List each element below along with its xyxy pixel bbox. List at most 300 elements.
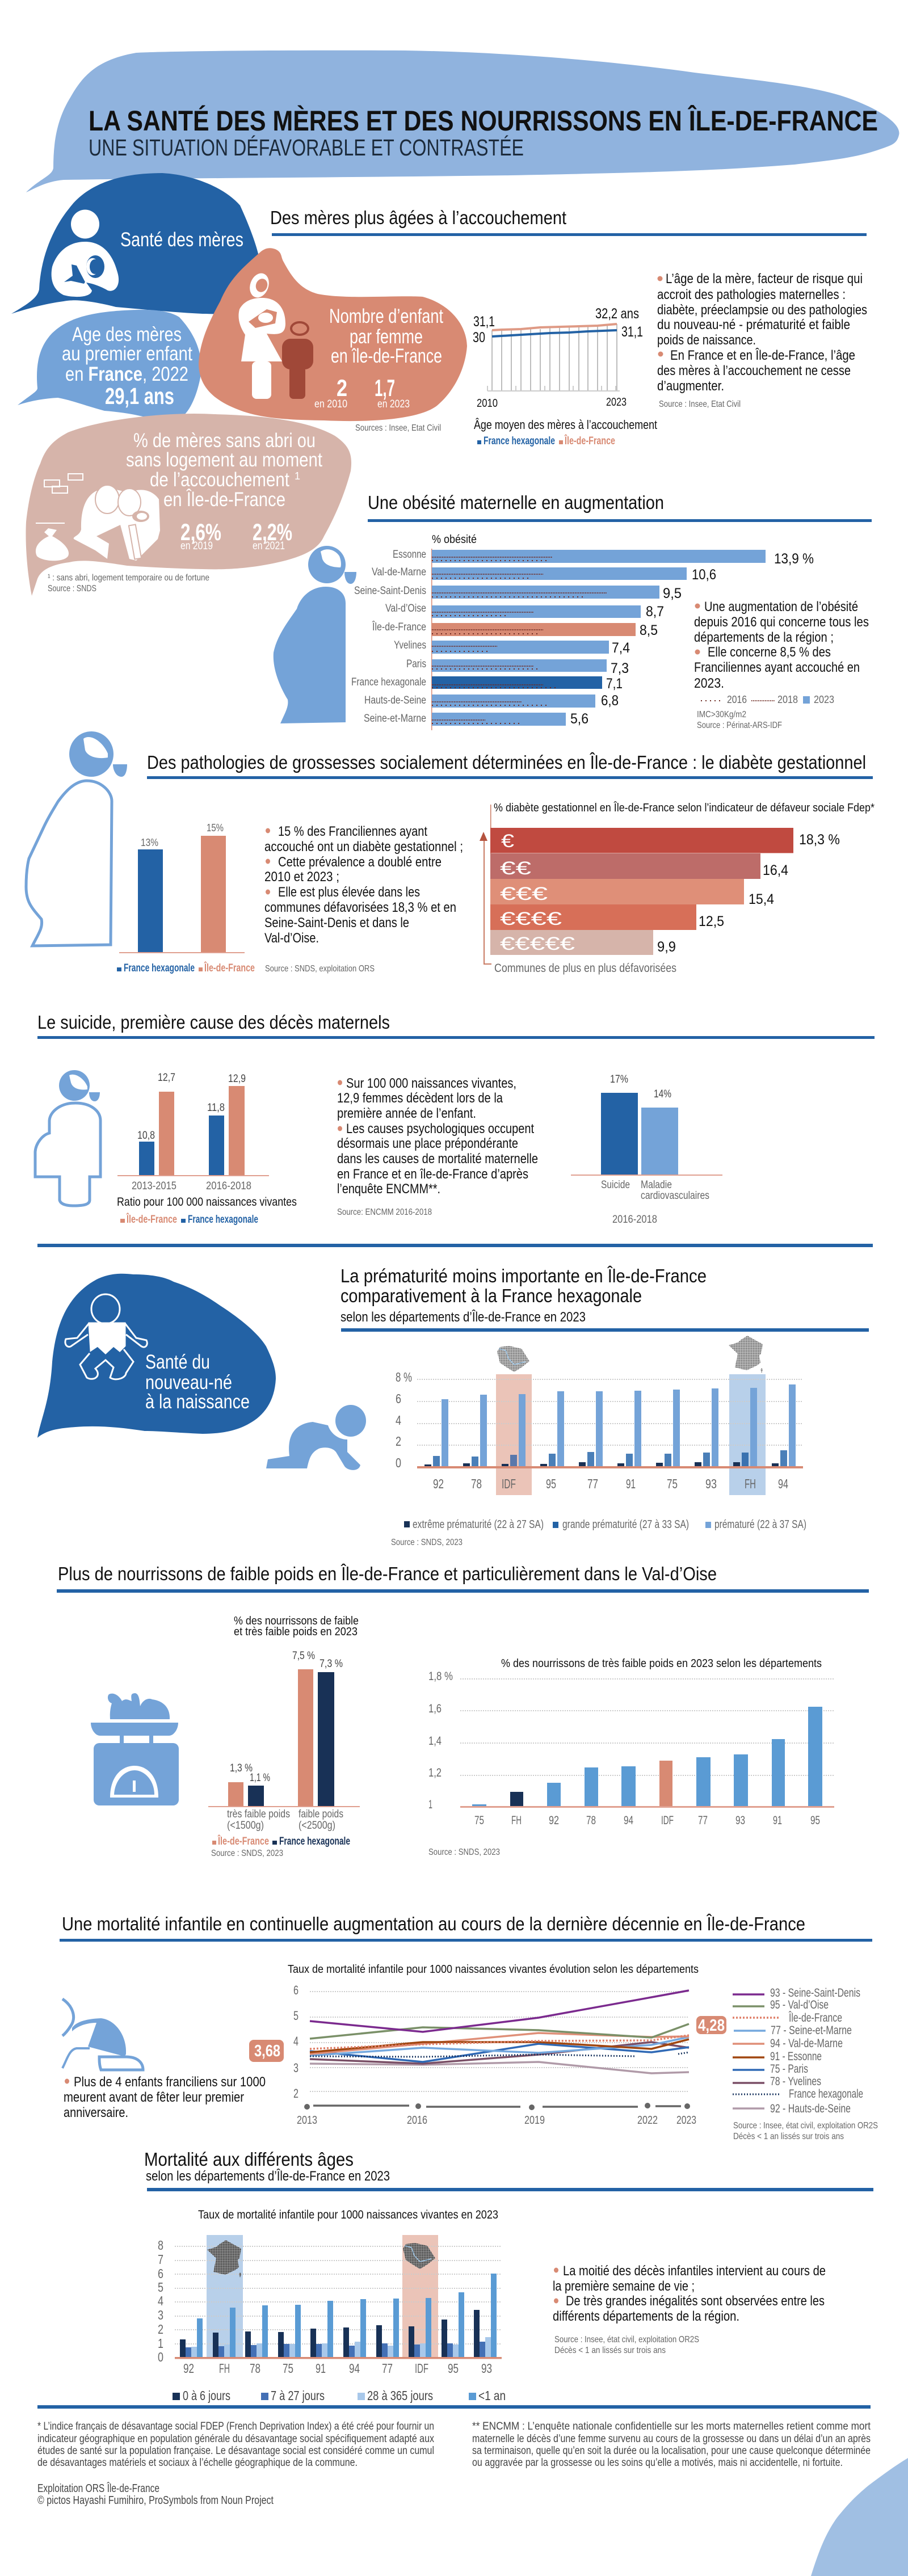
text block: âge de la mère: accroit des pathologies maternelles : <box>657 287 846 302</box>
source: diabète: Source : SNDS, exploitation ORS <box>265 964 375 974</box>
legend: France hexagonale <box>188 1214 258 1226</box>
line chart: mortalité infantile <box>249 1963 863 2127</box>
x axis labels: 91 <box>626 1476 636 1491</box>
axis labels: (<1500g) <box>227 1820 264 1832</box>
y axis labels: 6 <box>158 2266 163 2281</box>
label lines: nouveau-né: Santé du <box>145 1351 210 1373</box>
values: 5,6 <box>570 711 588 727</box>
category labels <box>351 549 426 725</box>
panel: age des mères bubble <box>18 310 201 420</box>
values: 13,9 % <box>774 551 814 567</box>
heading: des mères plus âgées: Des mères plus âgées à l’accouchement <box>270 207 566 228</box>
axis labels: 2013-2015 <box>132 1180 176 1192</box>
credits <box>37 2482 274 2507</box>
label lines: nombre d'enfant: en île-de-France <box>331 345 442 367</box>
chart title: % des nourrissons de très faible poids en 2023 selon les départements <box>501 1657 822 1670</box>
legend: prématurité: extrême prématurité (22 à 27 SA) <box>413 1518 544 1531</box>
icon: woman obese <box>274 546 356 723</box>
x axis labels <box>183 2361 492 2376</box>
legend: prématurité: grande prématurité (27 à 33 SA) <box>562 1518 689 1531</box>
y axis labels: 1 <box>158 2336 163 2351</box>
bar: quintile 1 <box>490 828 793 853</box>
bar chart: causes de décès: 2016-2018 <box>612 1214 657 1226</box>
bars: 7 à 27 jours <box>186 2342 485 2358</box>
x axis labels: FH <box>511 1814 522 1827</box>
legend: mortalité: 95 - Val-d’Oise <box>770 1998 829 2011</box>
label lines: age: 29,1 ans <box>105 383 174 409</box>
bar: quintile 2: €€ <box>500 858 531 878</box>
bar chart: très faible poids <box>428 1657 834 1827</box>
heading: mortalité infantile: Une mortalité infantile en continuelle augmentation au cours de la dernière décennie en Île-de-France <box>62 1913 805 1934</box>
time axis: 2016 <box>407 2114 427 2127</box>
legend: diabète: France hexagonale <box>124 962 195 974</box>
heading: faible poids: Plus de nourrissons de faible poids en Île-de-France et particulièrement dans le Val-d’Oise <box>58 1563 717 1584</box>
text block: mortalité aux âges: La moitié des décès infantiles intervient au cours de <box>563 2263 826 2279</box>
x axis labels <box>474 1814 820 1827</box>
text block: diabète: communes défavorisées 18,3 % et en <box>264 900 456 915</box>
values <box>570 551 814 727</box>
x axis labels: 78 <box>250 2361 260 2376</box>
icon: baby <box>65 1294 147 1379</box>
x axis labels: 95 <box>810 1814 820 1827</box>
values: 8,7 <box>646 604 664 620</box>
highlight: France hexagonale <box>729 1374 766 1495</box>
y axis labels <box>396 1370 412 1470</box>
category labels: Val-d’Oise <box>385 603 426 614</box>
bar: quintile 2 <box>490 853 760 879</box>
source: mortalité aux âges <box>554 2335 699 2355</box>
footnote: ENCMM: ** ENCMM : L’enquête nationale confidentielle sur les morts maternelles retient comme mort <box>472 2421 871 2432</box>
values: Fdep: 15,4 <box>749 891 774 907</box>
x axis labels: IDF <box>661 1814 674 1827</box>
credits: © pictos Hayashi Fumihiro, ProSymbols from Noun Project <box>37 2494 274 2507</box>
values: line chart <box>473 306 643 410</box>
time axis <box>297 2103 696 2127</box>
stat: 2,6 % en 2019: en 2019 <box>180 540 213 552</box>
line chart: âge moyen <box>473 306 657 447</box>
text block: âge de la mère: poids de naissance. <box>657 332 756 348</box>
text block: âge de la mère: En France et en Île-de-France, l’âge <box>670 348 855 363</box>
y axis labels: 2 <box>158 2322 163 2337</box>
panel: santé du nouveau-né bubble <box>37 1274 276 1438</box>
y axis labels: 3 <box>158 2308 163 2322</box>
bar: quintile 5: €€€€€ <box>500 933 575 954</box>
legend: obésité: 2023 <box>814 694 834 705</box>
values: line chart: 2010 <box>477 397 498 410</box>
bar: quintile 5 <box>490 930 653 955</box>
values: Fdep: 9,9 <box>657 939 676 955</box>
x axis labels: 94 <box>778 1476 788 1491</box>
corner bubble <box>811 2458 908 2576</box>
label lines: nouveau-né: à la naissance <box>145 1391 250 1413</box>
legend: obésité: 2018 <box>777 694 798 705</box>
bar chart: mortalité par âge <box>158 2208 502 2376</box>
y axis labels: 8 <box>158 2238 163 2253</box>
category labels: France hexagonale <box>351 676 426 688</box>
chart title: Taux de mortalité infantile pour 1000 naissances vivantes en 2023 <box>198 2208 498 2221</box>
text block: suicide: désormais une place prépondérante <box>337 1136 518 1151</box>
bars 2023 <box>432 550 766 726</box>
panel: nombre d'enfant bubble <box>199 248 467 421</box>
category labels: Yvelines <box>394 639 426 651</box>
stat: 2 en 2010: 2 <box>337 374 347 401</box>
heading: obésité: Une obésité maternelle en augmentation <box>368 492 664 513</box>
label lines: sans abri: sans logement au moment <box>126 449 322 471</box>
icon: map IDF <box>403 2243 435 2269</box>
text block: suicide: 12,9 femmes décèdent lors de la <box>337 1091 503 1106</box>
axis labels <box>227 1808 343 1832</box>
x axis labels: 91 <box>773 1814 782 1827</box>
values: 9,5 <box>663 586 682 601</box>
text block: diabète: Elle est plus élevée dans les <box>278 885 420 900</box>
icon: family without housing <box>36 474 160 561</box>
icon: woman outline (suicide) <box>35 1070 100 1206</box>
heading: santé des mères: Santé des mères <box>120 229 243 251</box>
values: 7,3 <box>611 660 629 676</box>
source: mortalité: Décès < 1 an lissés sur trois ans <box>733 2132 844 2141</box>
callout: 3,68: 3,68 <box>254 2042 280 2060</box>
y axis labels: 1 <box>428 1798 432 1811</box>
source: obésité: IMC>30Kg/m2 <box>697 710 746 719</box>
label lines: nouveau-né <box>145 1351 250 1413</box>
text block: âge de la mère: L’âge de la mère, facteur de risque qui <box>666 271 863 287</box>
source: mortalité aux âges: Décès < 1 an lissés sur trois ans <box>554 2346 666 2355</box>
y axis labels: 5 <box>158 2280 163 2295</box>
highlight: IDF <box>402 2235 438 2358</box>
y axis labels <box>428 1670 453 1811</box>
text block: diabète: accouché ont un diabète gestationnel ; <box>264 839 463 855</box>
x axis labels: 75 <box>667 1476 678 1491</box>
text block: obésité: Une augmentation de l’obésité <box>704 599 858 614</box>
text block: diabète: 2010 et 2023 ; <box>264 869 339 885</box>
icon: map France <box>207 2240 241 2278</box>
axis labels: faible poids <box>299 1808 343 1820</box>
y axis labels: 1,8 % <box>428 1670 453 1683</box>
stat: 2 en 2010 <box>314 374 347 410</box>
category labels: Val-de-Marne <box>372 566 426 578</box>
label lines: nombre d'enfant: Nombre d’enfant <box>329 305 443 327</box>
time axis: 2013 <box>297 2114 317 2127</box>
legend: obésité: 2016 <box>727 694 747 705</box>
legend: âge moyen <box>477 435 615 447</box>
bar chart: faible poids <box>208 1615 360 1847</box>
bar chart: diabète France vs IDF: 13% <box>141 837 158 848</box>
values: 7,1 <box>606 676 623 692</box>
icon: crawling baby <box>266 1405 366 1470</box>
chart title: et très faible poids en 2023 <box>234 1626 358 1638</box>
bar chart: diabète selon Fdep <box>480 801 875 975</box>
y labels: 2 <box>293 2086 299 2101</box>
values: line chart: 31,1 <box>473 314 495 330</box>
callout: 3,68 <box>249 2040 284 2062</box>
x axis labels: 93 <box>735 1814 745 1827</box>
text block: diabète: Cette prévalence a doublé entre <box>278 855 442 870</box>
stat: 2,2 % en 2021: en 2021 <box>253 540 285 552</box>
text block: obésité <box>694 599 869 691</box>
legend: mortalité <box>733 1986 863 2115</box>
values: line chart: 2023 <box>606 396 627 409</box>
stat: 2 en 2010: en 2010 <box>314 398 347 410</box>
footnote: FDEP: de désavantages matériels et sociaux à l’échelle géographique de la commune. <box>37 2457 358 2469</box>
x axis labels: 77 <box>382 2361 393 2376</box>
panel: mères sans abri bubble <box>26 414 351 596</box>
bar chart: causes de décès: Suicide <box>601 1179 630 1191</box>
values: 10,6 <box>692 567 716 583</box>
category labels: Seine-et-Marne <box>364 713 426 725</box>
source: mortalité <box>733 2121 878 2141</box>
heading: prématurité: La prématurité moins importante en Île-de-France <box>340 1265 707 1286</box>
bars: 0 à 6 jours <box>180 2310 480 2358</box>
x axis labels: 92 <box>433 1476 444 1491</box>
series lines <box>310 1990 689 2073</box>
bar chart: diabète France vs IDF <box>117 822 255 974</box>
credits: Exploitation ORS Île-de-France <box>37 2482 159 2495</box>
bars: moins d'un an <box>197 2274 497 2358</box>
values: 7,4 <box>612 640 630 656</box>
legend <box>120 1213 258 1226</box>
source: faible poids: Source : SNDS, 2023 <box>211 1849 283 1858</box>
label lines: age: Age des mères <box>72 323 182 346</box>
y axis labels <box>158 2238 163 2364</box>
icon: mother breastfeeding <box>52 210 119 297</box>
x axis labels: 93 <box>481 2361 492 2376</box>
legend: diabète: Île-de-France <box>204 962 255 974</box>
text block: obésité: depuis 2016 qui concerne tous les <box>694 614 869 630</box>
values: 10,8 <box>137 1130 155 1142</box>
bars: extrême prématurité <box>424 1462 779 1467</box>
text block: mortalité <box>64 2074 266 2120</box>
y axis labels: 6 <box>396 1391 401 1406</box>
text block: obésité: départements de la région ; <box>694 630 834 645</box>
values <box>230 1650 343 1784</box>
y axis labels: 0 <box>158 2350 163 2364</box>
values: Fdep <box>657 832 840 955</box>
x axis labels: 75 <box>474 1814 484 1827</box>
label lines: nombre d'enfant: par femme <box>350 326 423 348</box>
text block: mortalité aux âges: différents départements de la région. <box>553 2309 739 2324</box>
icon: map IDF <box>497 1346 529 1372</box>
values: 7,3 % <box>320 1658 343 1670</box>
text block: âge de la mère: des mères à l’accouchement ne cesse <box>657 363 851 378</box>
y axis labels: 1,2 <box>428 1766 442 1779</box>
stat: 2,6 % en 2019 <box>180 519 221 552</box>
x axis labels: 93 <box>705 1476 717 1491</box>
icon: mother with child <box>238 271 313 399</box>
heading: mortalité aux différents âges: selon les départements d’Île-de-France en 2023 <box>146 2169 390 2184</box>
y axis labels: 8 % <box>396 1370 412 1384</box>
x axis labels: 94 <box>349 2361 360 2376</box>
x axis labels: 95 <box>546 1476 556 1491</box>
source: mortalité aux âges: Source : Insee, état civil, exploitation OR2S <box>554 2335 699 2345</box>
highlight: France hexagonale <box>207 2235 243 2358</box>
values: 12,9 <box>228 1073 246 1085</box>
bar: quintile 4: €€€€ <box>500 908 562 929</box>
x axis labels: 91 <box>316 2361 326 2376</box>
label lines: nombre d'enfant <box>329 305 443 367</box>
label lines: sans abri: en Île-de-France <box>163 489 285 511</box>
source: obésité: Source : Périnat-ARS-IDF <box>697 721 782 730</box>
footnote: FDEP: études de santé sur la population française. Le désavantage social est considéré comme un cumul <box>37 2445 434 2457</box>
x axis labels: 78 <box>471 1476 482 1491</box>
arrow: défavorisation <box>480 832 491 964</box>
values: 7,5 % <box>292 1650 315 1662</box>
category labels: Essonne <box>393 549 426 561</box>
values: line chart: 32,2 ans <box>595 306 639 322</box>
highlight: IDF <box>496 1374 532 1495</box>
legend: prématurité <box>404 1518 806 1531</box>
chart title: % obésité: % obésité <box>432 533 477 546</box>
x axis labels: 78 <box>586 1814 596 1827</box>
bar: quintile 3: €€€ <box>500 883 548 904</box>
legend: mortalité par âge: <1 an <box>478 2388 506 2403</box>
footnote: FDEP: * L’indice français de désavantage social FDEP (French Deprivation Index) a été créé pour fournir un <box>37 2421 434 2432</box>
text block: suicide: l’enquête ENCMM**. <box>337 1181 440 1197</box>
stat: 1,7 en 2023: 1,7 <box>375 374 395 401</box>
text block: mortalité: meurent avant de fêter leur premier <box>64 2090 244 2105</box>
y labels: 5 <box>293 2009 299 2023</box>
icon: pregnant woman outline (diabetes) <box>26 731 127 946</box>
text block: mortalité: anniversaire. <box>64 2105 128 2120</box>
text block: âge de la mère: diabète, préeclampsie ou des pathologies <box>657 302 867 318</box>
legend: mortalité par âge: 0 à 6 jours <box>183 2388 230 2403</box>
panel: santé des mères bubble <box>11 173 260 314</box>
values: Fdep: 12,5 <box>699 914 724 929</box>
footnote: ENCMM: ou aggravée par la grossesse ou les soins qu’elle a motivés, mais ni accidentelle, ni fortuite. <box>472 2457 843 2469</box>
text block: diabète: Seine-Saint-Denis et dans le <box>264 915 409 931</box>
legend: mortalité par âge <box>173 2388 506 2403</box>
source: âge de la mère: Source : Insee, Etat Civil <box>659 399 741 409</box>
footnote: sans abri: Source : SNDS <box>48 584 96 594</box>
heading: mortalité aux différents âges <box>144 2149 390 2184</box>
values: Fdep: 18,3 % <box>799 832 840 848</box>
legend: mortalité: France hexagonale <box>789 2087 863 2101</box>
stat: 2,2 % en 2021: 2,2% <box>253 519 292 545</box>
x axis labels: FH <box>219 2361 230 2376</box>
legend: mortalité: 75 - Paris <box>770 2063 808 2076</box>
footnote: sans abri <box>48 573 209 594</box>
text block: suicide: Les causes psychologiques occupent <box>346 1121 534 1137</box>
bars: prématuré <box>442 1384 796 1467</box>
legend: mortalité: 77 - Seine-et-Marne <box>771 2024 852 2037</box>
y axis labels: 0 <box>396 1455 401 1470</box>
stat: 2,2 % en 2021 <box>253 519 292 552</box>
axis labels <box>132 1180 251 1192</box>
footnote: ENCMM <box>472 2421 871 2469</box>
chart caption: Ratio pour 100 000 naissances vivantes <box>117 1196 297 1209</box>
bar: quintile 1: € <box>501 831 514 851</box>
legend: mortalité: 93 - Seine-Saint-Denis <box>770 1986 860 2000</box>
values: 6,8 <box>601 693 619 709</box>
values: 8,5 <box>640 622 658 638</box>
chart title: Fdep: % diabète gestationnel en Île-de-France selon l’indicateur de défaveur sociale Fdep* <box>494 801 875 814</box>
bar chart: causes de décès: Maladie <box>641 1179 672 1191</box>
source: mortalité: Source : Insee, état civil, exploitation OR2S <box>733 2121 878 2131</box>
y labels: 6 <box>293 1983 299 1997</box>
label lines: age: au premier enfant <box>62 343 192 365</box>
footnote: sans abri: ¹ : sans abri, logement temporaire ou de fortune <box>48 573 209 583</box>
legend <box>212 1835 350 1847</box>
text block: âge de la mère: d’augmenter. <box>657 378 724 394</box>
x axis labels: 77 <box>698 1814 708 1827</box>
x axis labels: FH <box>745 1476 756 1491</box>
subtitle: UNE SITUATION DÉFAVORABLE ET CONTRASTÉE <box>89 134 524 161</box>
label lines: sans abri: de l’accouchement <box>150 469 289 491</box>
bar chart: causes de décès <box>571 1074 722 1226</box>
icon: child and mother fragment <box>62 1999 143 2070</box>
bar chart: causes de décès: 17% <box>610 1074 628 1085</box>
icon: baby scale <box>91 1693 179 1805</box>
label lines: sans abri: % de mères sans abri ou <box>133 430 316 452</box>
category labels: Paris <box>406 658 426 670</box>
x axis labels: 92 <box>549 1814 559 1827</box>
bar: quintile 4 <box>490 904 696 930</box>
x axis labels <box>433 1476 788 1491</box>
source: obésité <box>697 710 782 730</box>
category labels: Île-de-France <box>372 621 426 633</box>
x axis labels: 92 <box>183 2361 194 2376</box>
legend: obésité <box>701 694 834 705</box>
y axis labels: 4 <box>158 2293 163 2308</box>
x axis labels: 75 <box>283 2361 293 2376</box>
text block: diabète: Val-d’Oise. <box>264 931 319 946</box>
footnote: FDEP <box>37 2421 434 2469</box>
source: très faible poids: Source : SNDS, 2023 <box>428 1847 500 1857</box>
bars: 28 à 365 jours <box>191 2337 491 2358</box>
category labels: Seine-Saint-Denis <box>354 585 426 597</box>
text block: âge de la mère: du nouveau-né - prématurité et faible <box>657 317 850 332</box>
legend: mortalité par âge: 7 à 27 jours <box>271 2388 325 2403</box>
text block: suicide: dans les causes de mortalité maternelle <box>337 1151 538 1167</box>
legend: France hexagonale <box>279 1836 350 1847</box>
text block: mortalité aux âges: la première semaine de vie ; <box>553 2279 695 2294</box>
values: 1,1 % <box>250 1772 270 1784</box>
legend: âge moyen: France hexagonale <box>484 435 555 447</box>
text block: suicide <box>337 1076 538 1197</box>
values: line chart: 30 <box>473 330 485 346</box>
legend: Île-de-France <box>217 1835 269 1847</box>
footnote: FDEP: indicateur géographique en population générale du désavantage social spécifiquement adapté aux <box>37 2433 434 2445</box>
y axis labels: 2 <box>396 1434 401 1449</box>
heading: mortalité aux différents âges: Mortalité aux différents âges <box>144 2149 354 2170</box>
chart title: Taux de mortalité infantile pour 1000 naissances vivantes évolution selon les départements <box>288 1963 699 1976</box>
stat: 2,6 % en 2019: 2,6% <box>180 519 221 545</box>
bar chart: causes de décès: cardiovasculaires <box>641 1190 709 1202</box>
bar chart: prématurité <box>396 1336 806 1531</box>
axis labels: 2016-2018 <box>206 1180 251 1192</box>
text block: mortalité: Plus de 4 enfants franciliens sur 1000 <box>74 2074 266 2090</box>
text block: suicide: première année de l’enfant. <box>337 1106 476 1121</box>
label lines: nouveau-né: nouveau-né <box>145 1371 232 1394</box>
text block: mortalité aux âges: De très grandes inégalités sont observées entre les <box>566 2293 825 2309</box>
x axis labels: IDF <box>502 1476 516 1491</box>
text block: âge de la mère <box>657 271 867 394</box>
icon: map France <box>729 1336 763 1373</box>
axis caption: communes: Communes de plus en plus défavorisées <box>494 962 676 975</box>
dotted series 2016 <box>432 561 586 723</box>
heading: prématurité: comparativement à la France hexagonale <box>340 1285 642 1306</box>
legend: âge moyen: Île-de-France <box>564 435 615 447</box>
text block: diabète: 15 % des Franciliennes ayant <box>278 824 427 839</box>
y labels <box>293 1983 299 2101</box>
legend: Île-de-France <box>126 1213 177 1226</box>
values: 12,7 <box>158 1072 175 1084</box>
heading: suicide: Le suicide, première cause des décès maternels <box>37 1012 390 1033</box>
label lines: age: en France, 2022 <box>65 363 188 385</box>
label lines: sans abri <box>126 430 322 511</box>
time axis: 2019 <box>524 2114 545 2127</box>
title bubble <box>26 50 899 192</box>
x axis labels: 77 <box>587 1476 598 1491</box>
